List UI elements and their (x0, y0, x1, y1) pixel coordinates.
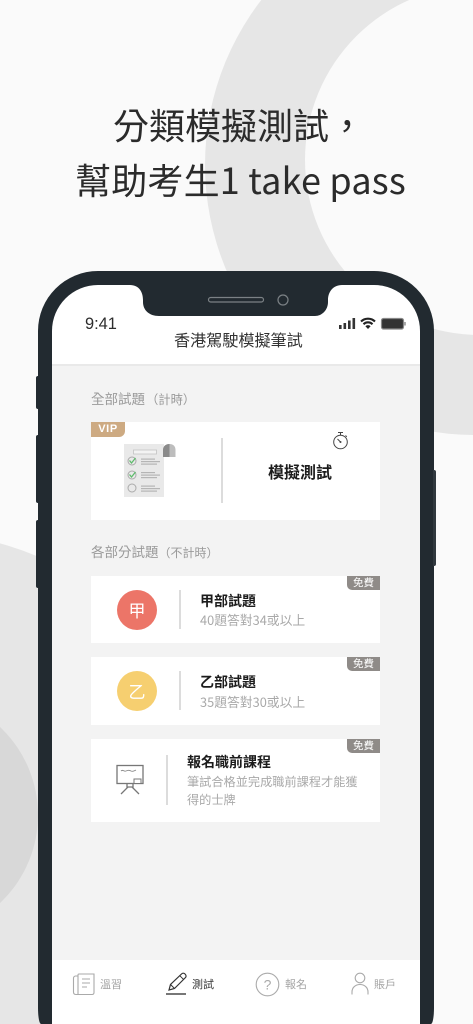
app header title: 香港駕駛模擬筆試 (174, 327, 303, 351)
notch (130, 285, 342, 316)
tab: test (active) (166, 972, 214, 995)
status icons (339, 318, 406, 330)
course description: 筆試合格並完成職前課程才能獲 (187, 772, 358, 790)
panel: part B card (91, 657, 380, 725)
icon: checklist document (124, 444, 176, 497)
VIP tag (91, 422, 125, 437)
tab bar background (52, 960, 420, 1024)
free tag (347, 576, 380, 590)
icon: part B circle (117, 671, 157, 711)
part A description: 40題答對34或以上 (200, 610, 305, 629)
icon: part A circle (117, 590, 157, 630)
tab label: 溫習 (100, 976, 122, 992)
icon: person (351, 972, 368, 994)
icon: pencil (166, 972, 187, 995)
card divider (221, 438, 223, 503)
phone frame (36, 271, 436, 1024)
icon: presentation board (116, 764, 144, 794)
icon: book (72, 974, 94, 995)
panel: part A card (91, 576, 380, 643)
tab label: 報名 (285, 976, 307, 992)
part B title: 乙部試題 (200, 672, 256, 692)
icon: part B circle: 乙 (128, 678, 146, 703)
status time: 9:41 (85, 315, 117, 333)
tab label: 賬戶 (374, 976, 396, 992)
icon: part A circle: 甲 (128, 597, 146, 622)
course description (187, 772, 358, 808)
card divider (179, 590, 181, 629)
title: 幫助考生1 take pass (75, 153, 406, 205)
panel: full mock test card (91, 422, 380, 520)
header divider and content background (52, 364, 420, 960)
part B description: 35題答對30或以上 (200, 692, 305, 711)
tab: account (351, 972, 396, 994)
tab: register (256, 972, 307, 996)
free tag (347, 739, 380, 753)
free tag: 免費 (353, 738, 374, 753)
free tag: 免費 (353, 656, 374, 671)
card divider (179, 671, 181, 710)
course description: 得的士牌 (187, 790, 236, 808)
part A title: 甲部試題 (200, 591, 256, 611)
icon: question mark: ? (264, 976, 272, 992)
free tag: 免費 (353, 575, 374, 590)
card title: 模擬測試 (268, 459, 332, 483)
title (75, 98, 406, 205)
VIP tag: VIP (98, 423, 118, 435)
section label: full test: 全部試題（計時） (91, 388, 195, 408)
section label: part tests: 各部分試題（不計時） (91, 541, 219, 561)
free tag (347, 657, 380, 671)
title: 分類模擬測試， (113, 98, 365, 150)
card divider (166, 755, 168, 805)
phone screen (52, 285, 420, 1024)
panel: pre-licence course card (91, 739, 380, 822)
course title: 報名職前課程 (187, 752, 271, 772)
tab: review (72, 974, 122, 995)
icon: question mark (256, 972, 280, 996)
icon: stopwatch (333, 432, 348, 450)
tab label: 測試 (192, 976, 214, 992)
